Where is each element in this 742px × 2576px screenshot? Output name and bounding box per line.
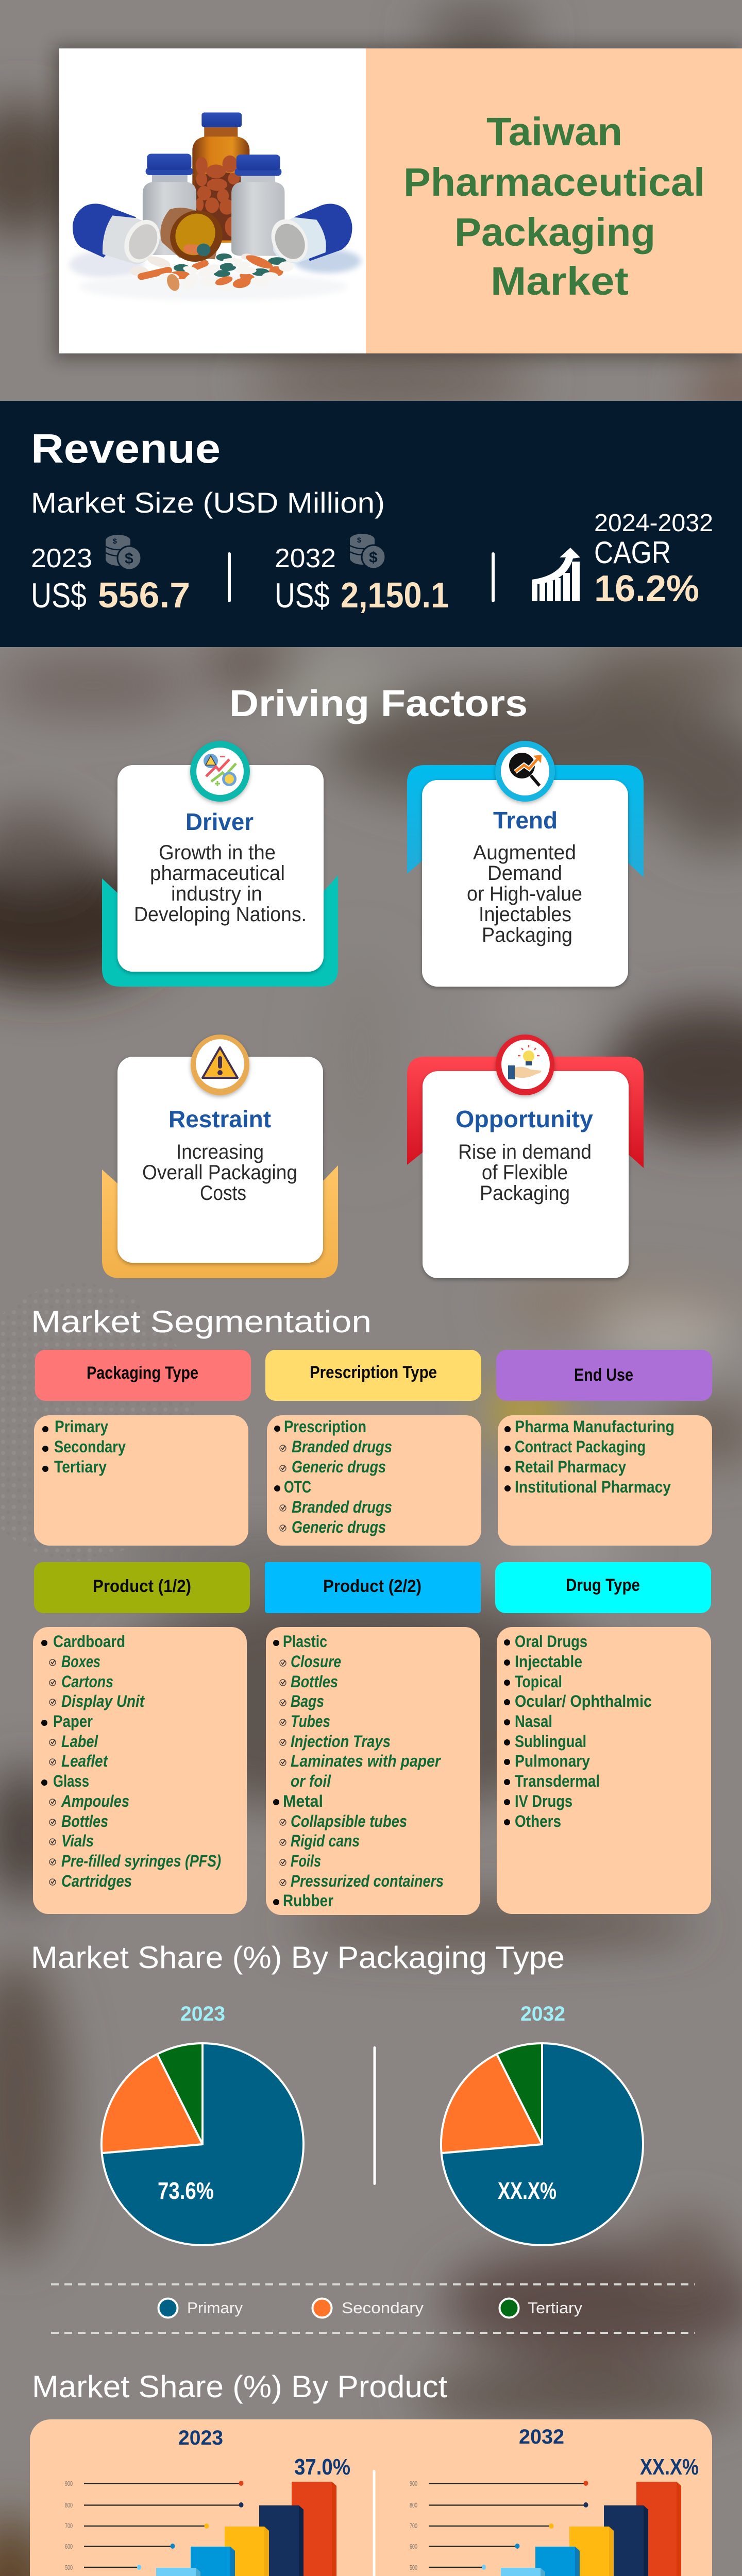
legend: packaging type <box>159 2299 583 2317</box>
2023 revenue: 2023 <box>31 544 92 573</box>
panel: product 2 of 2 <box>265 1562 481 1915</box>
panel: prescription type: Branded drugs <box>292 1437 392 1456</box>
panel: end use: Institutional Pharmacy <box>515 1478 671 1496</box>
bar chart: 2032 <box>410 2480 683 2576</box>
pie chart: 2032: 2032 <box>520 2003 565 2025</box>
panel: drug type: Injectable <box>515 1652 582 1671</box>
title: Pharmaceutical <box>403 160 705 205</box>
text: trend description: Augmented <box>473 841 576 864</box>
bar chart: 2032: 500 <box>410 2564 417 2571</box>
panel: packaging type: Tertiary <box>54 1458 107 1476</box>
panel: product 1 of 2: Display Unit <box>61 1692 145 1710</box>
year label 2032: 2032 <box>519 2426 564 2448</box>
2032 revenue: 2032 <box>275 544 336 573</box>
text: driver description: Growth in the <box>159 841 276 864</box>
panel: packaging type <box>34 1350 251 1546</box>
panel: drug type: Sublingual <box>515 1732 586 1751</box>
heading: trend: Trend <box>493 807 558 834</box>
bar chart: 2032: 900 <box>410 2480 417 2487</box>
panel: product 2 of 2: Closure <box>291 1652 341 1671</box>
text: opportunity description: of Flexible <box>482 1161 568 1184</box>
bar chart: 2032: 600 <box>410 2543 417 2550</box>
text: driver description: Developing Nations. <box>134 903 307 926</box>
panel: product 2 of 2: Laminates with paper <box>291 1752 441 1770</box>
bar chart: 2023: 800 <box>65 2501 73 2509</box>
bar chart: 2023: 900 <box>65 2480 73 2487</box>
panel: product 2 of 2: Rigid cans <box>291 1832 360 1850</box>
panel: prescription type: Generic drugs <box>292 1518 386 1536</box>
pie chart: 2032 <box>441 2003 643 2245</box>
panel: end use: End Use <box>574 1365 633 1385</box>
text: restraint description: Costs <box>200 1182 246 1205</box>
heading: driver: Driver <box>185 808 254 835</box>
panel: product 2 of 2: Tubes <box>291 1712 330 1731</box>
market size label: Market Size (USD Million) <box>31 486 385 519</box>
legend: packaging type: Tertiary <box>528 2299 583 2317</box>
panel: prescription type: Prescription <box>284 1417 366 1436</box>
text: trend description <box>467 841 582 946</box>
panel: drug type: IV Drugs <box>515 1792 572 1810</box>
panel: product 1 of 2: Ampoules <box>61 1792 129 1810</box>
2032 revenue: US$ <box>275 576 330 615</box>
panel: product 2 of 2: Metal <box>283 1792 323 1810</box>
panel: end use: Contract Packaging <box>515 1437 646 1456</box>
panel: product 1 of 2: Product (1/2) <box>93 1577 191 1596</box>
2023 revenue <box>31 535 190 615</box>
card: trend <box>407 741 644 987</box>
card: driver <box>102 741 338 987</box>
2032 revenue: 2,150.1 <box>341 575 449 615</box>
panel: drug type: Nasal <box>515 1712 552 1731</box>
revenue heading: Revenue <box>31 426 221 471</box>
panel: product share charts <box>30 2419 712 2576</box>
panel: end use <box>496 1350 712 1546</box>
panel: packaging type: Primary <box>55 1417 108 1436</box>
bar chart: 2023: 700 <box>65 2522 73 2530</box>
panel: product 2 of 2: Plastic <box>283 1632 327 1651</box>
panel: product 1 of 2: Paper <box>53 1712 93 1731</box>
text: opportunity description: Packaging <box>480 1182 570 1205</box>
revenue band <box>0 401 742 647</box>
panel: prescription type <box>265 1350 481 1546</box>
icon: restraint <box>191 1035 249 1095</box>
panel: product 1 of 2: Label <box>61 1732 98 1751</box>
value 37.0%: 37.0% <box>294 2454 350 2480</box>
panel: product 2 of 2: Pressurized containers <box>291 1872 444 1890</box>
icon: opportunity <box>496 1035 554 1095</box>
text: restraint description: Increasing <box>176 1141 264 1163</box>
heading: driving factors: Driving Factors <box>229 683 528 724</box>
title <box>403 110 705 303</box>
panel: product 1 of 2: Pre-filled syringes (PFS) <box>61 1852 221 1870</box>
panel: product 1 of 2: Glass <box>53 1772 89 1790</box>
hero image: pharmaceutical bottles and pills <box>59 48 366 353</box>
panel: product 2 of 2: Foils <box>291 1852 321 1870</box>
heading: market share by packaging type: Market Share (%) By Packaging Type <box>31 1940 565 1975</box>
right white bottle <box>241 174 275 184</box>
text: trend description: Packaging <box>482 924 572 946</box>
header panel <box>59 48 742 353</box>
panel: product 2 of 2: Injection Trays <box>291 1732 391 1751</box>
bar chart: 2032: 700 <box>410 2522 417 2530</box>
2023 revenue: 556.7 <box>98 575 190 615</box>
icon: growth arrow <box>532 548 580 601</box>
panel: drug type <box>495 1562 711 1914</box>
text: trend description: Injectables <box>479 903 571 926</box>
panel: product 1 of 2: Vials <box>61 1832 94 1850</box>
panel: prescription type: Generic drugs <box>292 1458 386 1476</box>
text: trend description: Demand <box>487 862 562 885</box>
title: Taiwan <box>486 110 622 154</box>
bar chart: 2023: 500 <box>65 2564 73 2571</box>
panel: end use: Retail Pharmacy <box>515 1458 626 1476</box>
2023 revenue: US$ <box>31 576 87 615</box>
panel: packaging type: Secondary <box>54 1437 126 1456</box>
right lying bottle <box>294 204 352 261</box>
text: opportunity description: Rise in demand <box>458 1141 592 1163</box>
panel: product 1 of 2: Leaflet <box>61 1752 108 1770</box>
panel: drug type: Pulmonary <box>515 1752 590 1770</box>
panel: prescription type: OTC <box>284 1478 311 1496</box>
panel: drug type: Ocular/ Ophthalmic <box>515 1692 652 1710</box>
icon: driver <box>190 741 250 802</box>
2032 revenue <box>275 534 449 615</box>
panel: product 2 of 2: Rubber <box>283 1891 333 1910</box>
legend: packaging type: Primary <box>187 2299 243 2317</box>
panel: prescription type: Prescription Type <box>310 1363 437 1382</box>
bar chart: 2023 <box>65 2480 339 2576</box>
icon: trend <box>495 741 555 802</box>
amber bottle <box>204 126 238 138</box>
card: opportunity <box>407 1035 644 1278</box>
pie chart: 2023: 73.6% <box>158 2177 214 2204</box>
title: Market <box>491 259 629 303</box>
bar chart: 2023: 600 <box>65 2543 73 2550</box>
left white bottle <box>152 174 188 184</box>
heading: restraint: Restraint <box>168 1106 271 1132</box>
text: opportunity description <box>458 1141 592 1205</box>
text: driver description: industry in <box>171 883 262 905</box>
pie chart: 2023: 2023 <box>180 2003 225 2025</box>
text: trend description: or High-value <box>467 883 582 905</box>
year label 2023: 2023 <box>178 2427 223 2449</box>
legend: packaging type: Secondary <box>342 2299 424 2317</box>
CAGR: 2024-2032 <box>594 510 713 537</box>
heading: market segmentation: Market Segmentation <box>31 1304 372 1339</box>
panel: product 1 of 2: Boxes <box>61 1652 100 1671</box>
panel: prescription type: Branded drugs <box>292 1498 392 1516</box>
panel: product 2 of 2: Bottles <box>291 1672 338 1691</box>
tipped amber jar <box>160 208 221 259</box>
panel: product 2 of 2: Bags <box>291 1692 324 1710</box>
panel: product 1 of 2: Cartridges <box>61 1872 132 1890</box>
panel: product 2 of 2: Collapsible tubes <box>291 1812 407 1831</box>
CAGR: 16.2% <box>594 568 699 609</box>
CAGR: CAGR <box>594 535 671 570</box>
heading: market share by product: Market Share (%) By Product <box>32 2369 447 2404</box>
panel: product 2 of 2: Product (2/2) <box>323 1577 421 1596</box>
title: Packaging <box>454 210 655 255</box>
panel: product 1 of 2 <box>33 1562 250 1914</box>
panel: packaging type: Packaging Type <box>87 1363 198 1383</box>
panel: drug type: Topical <box>515 1672 562 1691</box>
panel: product 1 of 2: Cartons <box>61 1672 113 1691</box>
card: restraint <box>102 1035 338 1278</box>
bar chart: 2032: 800 <box>410 2501 417 2509</box>
header shadow <box>54 45 742 360</box>
CAGR <box>594 510 713 609</box>
panel: drug type: Transdermal <box>515 1772 600 1790</box>
panel: product 1 of 2: Cardboard <box>53 1632 125 1651</box>
panel: end use: Pharma Manufacturing <box>515 1417 674 1436</box>
panel: drug type: Oral Drugs <box>515 1632 587 1651</box>
left lying bottle <box>73 204 136 258</box>
panel: drug type: Others <box>515 1812 561 1831</box>
panel: drug type: Drug Type <box>566 1575 640 1595</box>
panel: product 1 of 2: Bottles <box>61 1812 108 1831</box>
heading: opportunity: Opportunity <box>456 1106 593 1132</box>
panel: product 2 of 2: or foil <box>291 1772 331 1790</box>
text: driver description: pharmaceutical <box>150 862 285 885</box>
text: driver description <box>134 841 307 926</box>
pie chart: 2023 <box>102 2003 303 2245</box>
pills <box>130 252 294 293</box>
pie chart: 2032: XX.X% <box>498 2177 556 2204</box>
text: restraint description <box>142 1141 297 1205</box>
text: restraint description: Overall Packaging <box>142 1161 297 1184</box>
value XX.X%: XX.X% <box>640 2454 699 2480</box>
